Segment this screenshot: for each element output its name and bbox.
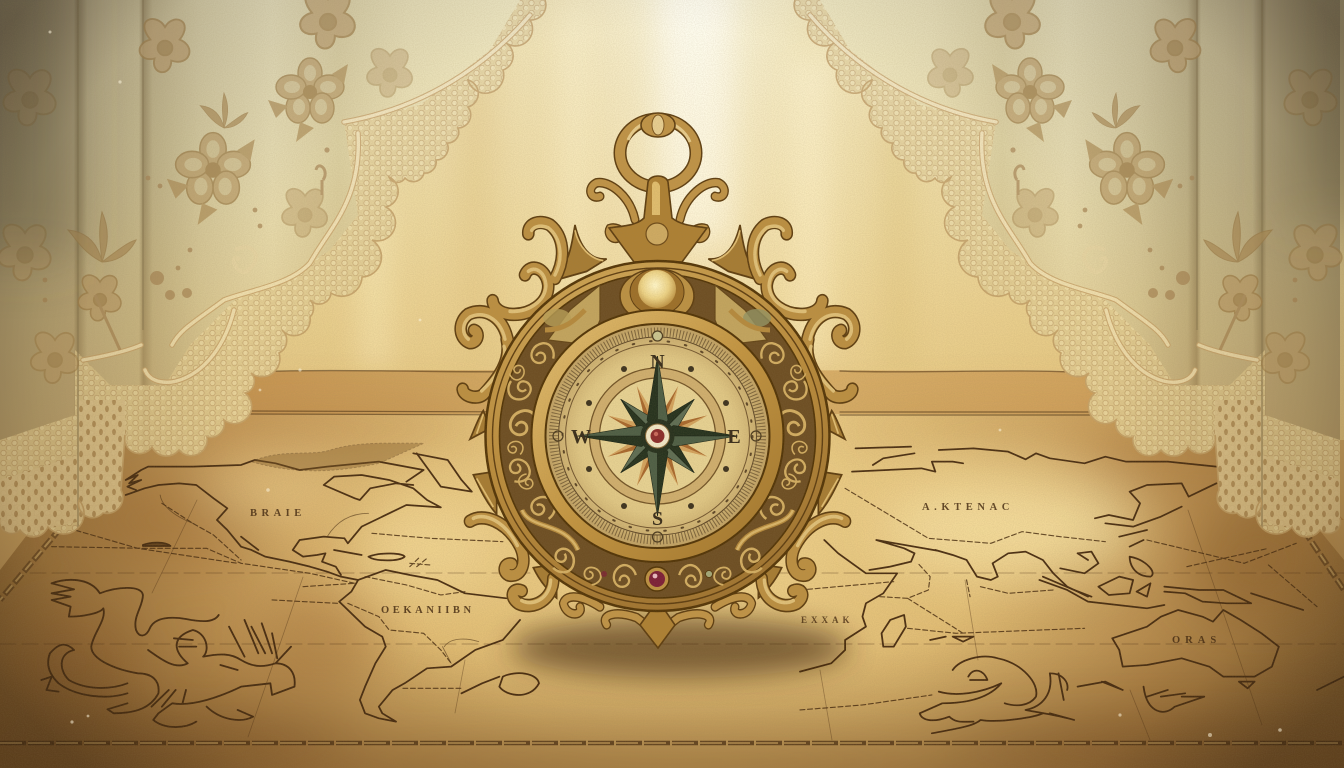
sea dragon left: [41, 580, 295, 727]
map label: Aktenac: A.KTENAC: [922, 502, 1014, 513]
map sheet: [0, 411, 1344, 768]
panel: right lace curtain: [780, 0, 1342, 540]
compass rose star: [578, 356, 738, 516]
compass cardinal markers: [553, 331, 761, 542]
panel: left lace curtain: [0, 0, 560, 540]
compass hanging ring: [620, 113, 696, 187]
map label: Oekaniibn: OEKANIIBN: [381, 605, 475, 616]
map label: Oras: ORAS: [1172, 635, 1221, 646]
compass letter E: E: [727, 426, 741, 448]
compass bottom gem: [601, 567, 712, 591]
compass letter N: N: [650, 351, 665, 373]
icon: ornate compass: [461, 113, 854, 648]
compass bail: [609, 176, 707, 262]
compass top panels: [543, 285, 771, 345]
compass letter W: W: [571, 426, 591, 448]
compass filigree mirrored: [677, 310, 810, 590]
map label: Braie: BRAIE: [250, 508, 306, 519]
corner shading on curtains: [0, 0, 1344, 260]
compass top medallion: [620, 269, 694, 323]
compass scrollwork right: [658, 183, 854, 636]
map border chain: [0, 480, 1344, 743]
compass scrollwork left: [461, 183, 657, 636]
compass bottom finial: [640, 600, 675, 648]
compass drop shadow: [510, 618, 850, 678]
compass letter S: S: [652, 508, 663, 530]
map label: Exxak: EXXAK: [801, 615, 854, 625]
compass dial: [546, 324, 770, 548]
table back band: [0, 370, 1344, 520]
compass filigree band: [505, 310, 638, 590]
map: Americas: [52, 443, 539, 722]
sea creature right: [920, 657, 1344, 733]
compass inner gold ring: [532, 310, 784, 562]
map: Africa, Asia, Australia: [800, 447, 1317, 710]
compass outer case: [486, 261, 830, 611]
compass rose ring: [590, 368, 726, 504]
backdrop wall with light: [0, 0, 1344, 440]
